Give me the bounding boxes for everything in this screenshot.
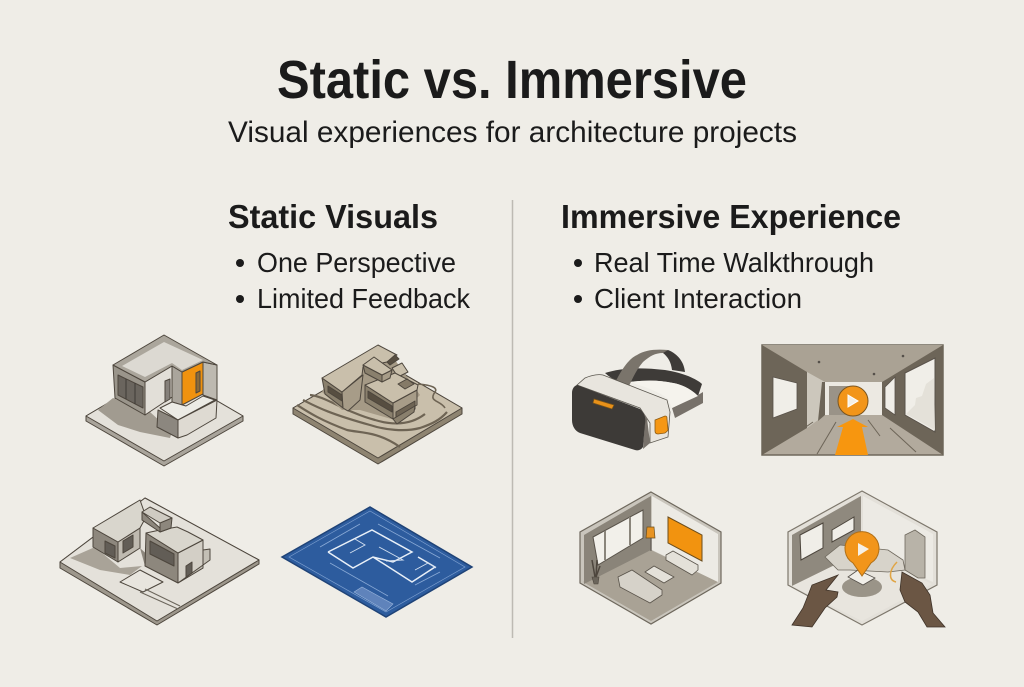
bullet list: immersive experience: Client Interaction bbox=[594, 283, 802, 314]
icon: right hand bbox=[900, 572, 945, 627]
icon: blueprint floor plan bbox=[282, 507, 472, 617]
title: Static vs. Immersive bbox=[277, 50, 747, 110]
panel: immersive experience text bbox=[561, 198, 901, 314]
heading: immersive experience: Immersive Experience bbox=[561, 198, 901, 235]
panel: static visuals text bbox=[228, 198, 471, 314]
icon: VR headset bbox=[572, 350, 703, 450]
icon: isometric living room with orange screen bbox=[580, 492, 721, 624]
icon: interior walkthrough with play button and arrow bbox=[762, 345, 943, 455]
heading: static visuals: Static Visuals bbox=[228, 198, 438, 235]
bullet list: static visuals bbox=[236, 247, 471, 314]
icon: isometric house with orange wall bbox=[86, 335, 243, 466]
icon: isometric terrain model bbox=[293, 345, 462, 464]
bullet list: static visuals: One Perspective bbox=[257, 247, 456, 278]
bullet list: immersive experience bbox=[574, 247, 874, 314]
bullet list: immersive experience: Real Time Walkthrough bbox=[594, 247, 874, 278]
subtitle: Visual experiences for architecture projects bbox=[228, 116, 797, 149]
icon: left hand bbox=[792, 575, 838, 627]
icon: interactive room with hands and play pin bbox=[788, 491, 945, 627]
icon: isometric house on large site bbox=[60, 498, 259, 625]
bullet list: static visuals: Limited Feedback bbox=[257, 283, 471, 314]
